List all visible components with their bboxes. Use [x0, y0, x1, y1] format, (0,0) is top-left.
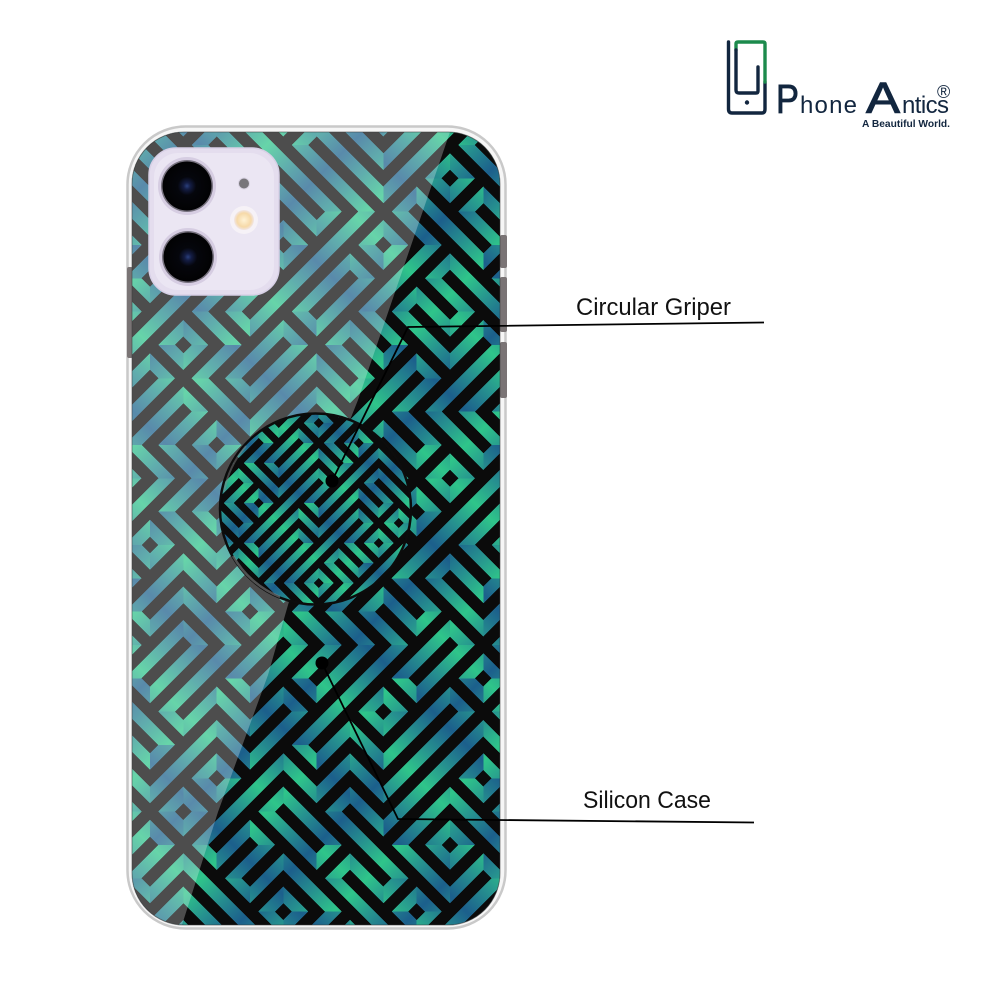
- logo wordmark: hone: [800, 92, 857, 119]
- callout label: griper: Circular Griper: [576, 294, 731, 321]
- icon: flash: [230, 206, 258, 234]
- logo: [728, 42, 950, 130]
- logo wordmark: [776, 74, 950, 130]
- logo wordmark: A Beautiful World.: [862, 118, 950, 130]
- glossy reflection overlay: [132, 132, 450, 925]
- camera module: [149, 148, 279, 295]
- logo wordmark: A: [866, 74, 901, 123]
- panel: case back pattern: [132, 132, 500, 925]
- icon: microphone dot: [238, 178, 250, 189]
- circular griper: [218, 412, 412, 606]
- pattern: diagonal maze bands: [132, 132, 500, 925]
- icon: logo phone: [728, 42, 765, 113]
- phone case outer shell: [128, 126, 506, 928]
- callout line: silicon case: [316, 656, 754, 822]
- logo wordmark: ntics: [902, 92, 949, 119]
- icon: bottom lens: [159, 228, 217, 286]
- case inner rim highlight: [132, 132, 500, 925]
- side buttons: [127, 235, 507, 398]
- callout line: griper: [326, 322, 764, 488]
- logo wordmark: ®: [937, 82, 950, 102]
- icon: top lens: [158, 157, 216, 215]
- callout label: silicon case: Silicon Case: [583, 787, 711, 814]
- logo wordmark: P: [776, 76, 799, 122]
- griper pattern: [221, 414, 410, 604]
